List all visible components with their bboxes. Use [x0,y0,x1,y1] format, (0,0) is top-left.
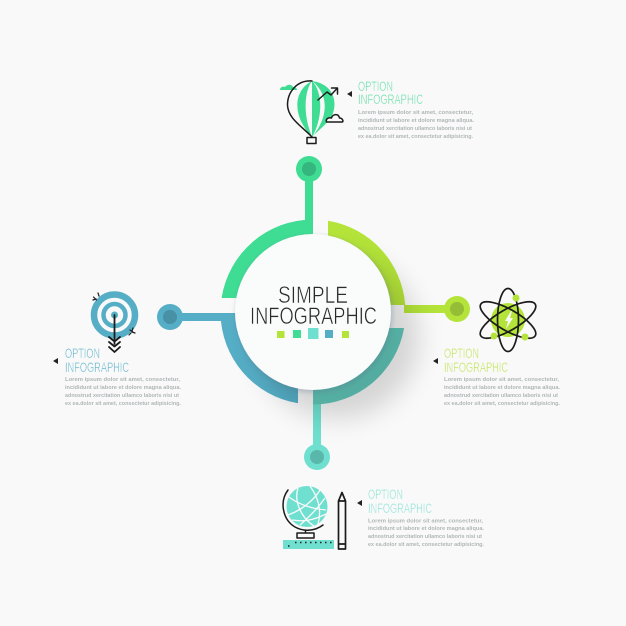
stem and node: left [157,304,223,330]
center title: INFOGRAPHIC [250,303,377,330]
stem and node: bottom [304,402,330,470]
text block: left option: adnostrud xercitation ullamco laboris nisi ut [65,393,179,399]
text block: right option [433,345,560,407]
ring segment: lime [328,221,405,305]
text block: top option: adnostrud xercitation ullamco laboris nisi ut [358,126,472,132]
center colour squares [277,328,349,339]
center shadow [235,235,419,419]
stem and node: top [296,156,322,221]
icon: atom [475,288,541,352]
text block: right option: incididunt ut labore et dolore magna aliqua. [444,385,560,391]
center circle [235,234,391,390]
icon: globe, ruler and pencil [283,486,346,549]
text block: top option [347,78,474,140]
text block: left option: Lorem ipsum dolor sit amet, consectetur, [65,377,180,383]
text block: top option: ex ea.dolor sit amet, consectetur adipisicing. [358,134,473,140]
text block: top option: Lorem ipsum dolor sit amet, consectetur, [358,110,473,116]
text block: bottom option: OPTION [368,486,403,502]
text block: left option: ex ea.dolor sit amet, consectetur adipisicing. [65,401,181,407]
text block: left option: INFOGRAPHIC [65,359,129,375]
text block: bottom option: Lorem ipsum dolor sit amet, consectetur, [368,518,483,524]
text block: right option: adnostrud xercitation ullamco laboris nisi ut [444,393,558,399]
text block: left option: incididunt ut labore et dolore magna aliqua. [65,385,181,391]
text block: bottom option: adnostrud xercitation ullamco laboris nisi ut [368,534,482,540]
text block: right option: Lorem ipsum dolor sit amet, consectetur, [444,377,559,383]
text block: right option: ex ea.dolor sit amet, consectetur adipisicing. [444,401,560,407]
text block: bottom option: incididunt ut labore et dolore magna aliqua. [368,526,484,532]
ring segment: green [222,220,313,298]
center title: SIMPLE [278,282,348,309]
text block: top option: OPTION [358,78,393,94]
stem and node: right [404,296,470,322]
text block: bottom option: INFOGRAPHIC [368,500,432,516]
text block: left option [53,345,181,407]
text block: left option: OPTION [65,345,100,361]
ring segment: teal [313,328,404,404]
text block: bottom option [357,486,484,548]
center title [250,282,377,330]
text block: right option: OPTION [444,345,479,361]
text block: bottom option: ex ea.dolor sit amet, consectetur adipisicing. [368,542,484,548]
ring segment: blue [220,313,298,403]
icon: target with arrow [93,293,135,352]
text block: right option: INFOGRAPHIC [444,359,508,375]
text block: top option: incididunt ut labore et dolore magna aliqua. [358,118,474,124]
icon: hot air balloon [280,81,343,144]
text block: top option: INFOGRAPHIC [358,91,423,107]
